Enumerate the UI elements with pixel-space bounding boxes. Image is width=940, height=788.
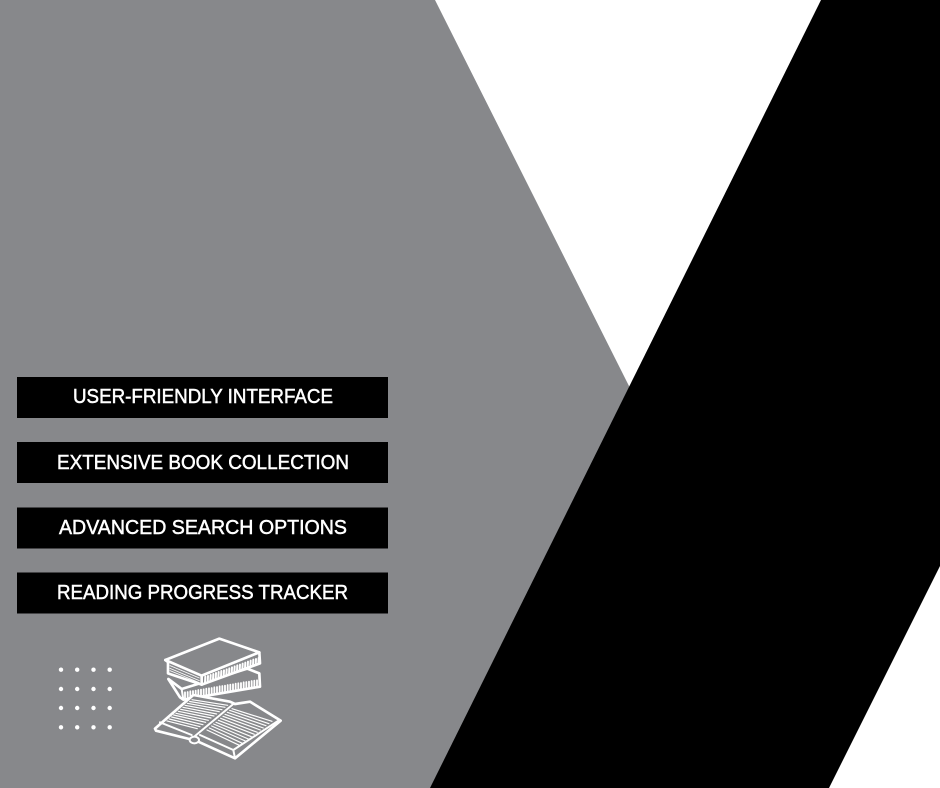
feature: reading progress tracker — [17, 572, 388, 614]
icon: stack of books with open book — [155, 639, 281, 758]
feature: reading progress tracker: READING PROGRESS TRACKER — [57, 581, 348, 604]
left page text lines — [167, 700, 228, 729]
feature: user-friendly interface — [17, 377, 388, 418]
lower closed book — [168, 669, 260, 700]
open book — [155, 695, 281, 758]
feature: extensive book collection: EXTENSIVE BOOK COLLECTION — [57, 451, 349, 474]
dot grid decoration — [59, 668, 112, 730]
spine loop — [190, 737, 199, 743]
feature: extensive book collection — [17, 442, 388, 483]
panel: grey hexagonal shape — [0, 0, 650, 788]
feature: advanced search options — [17, 508, 388, 548]
feature: advanced search options: ADVANCED SEARCH OPTIONS — [59, 516, 347, 539]
right page text lines — [207, 709, 272, 745]
feature list — [17, 377, 388, 614]
panel: black diagonal band — [430, 0, 940, 788]
feature: user-friendly interface: USER-FRIENDLY INTERFACE — [73, 385, 333, 408]
upper closed book — [165, 639, 260, 685]
